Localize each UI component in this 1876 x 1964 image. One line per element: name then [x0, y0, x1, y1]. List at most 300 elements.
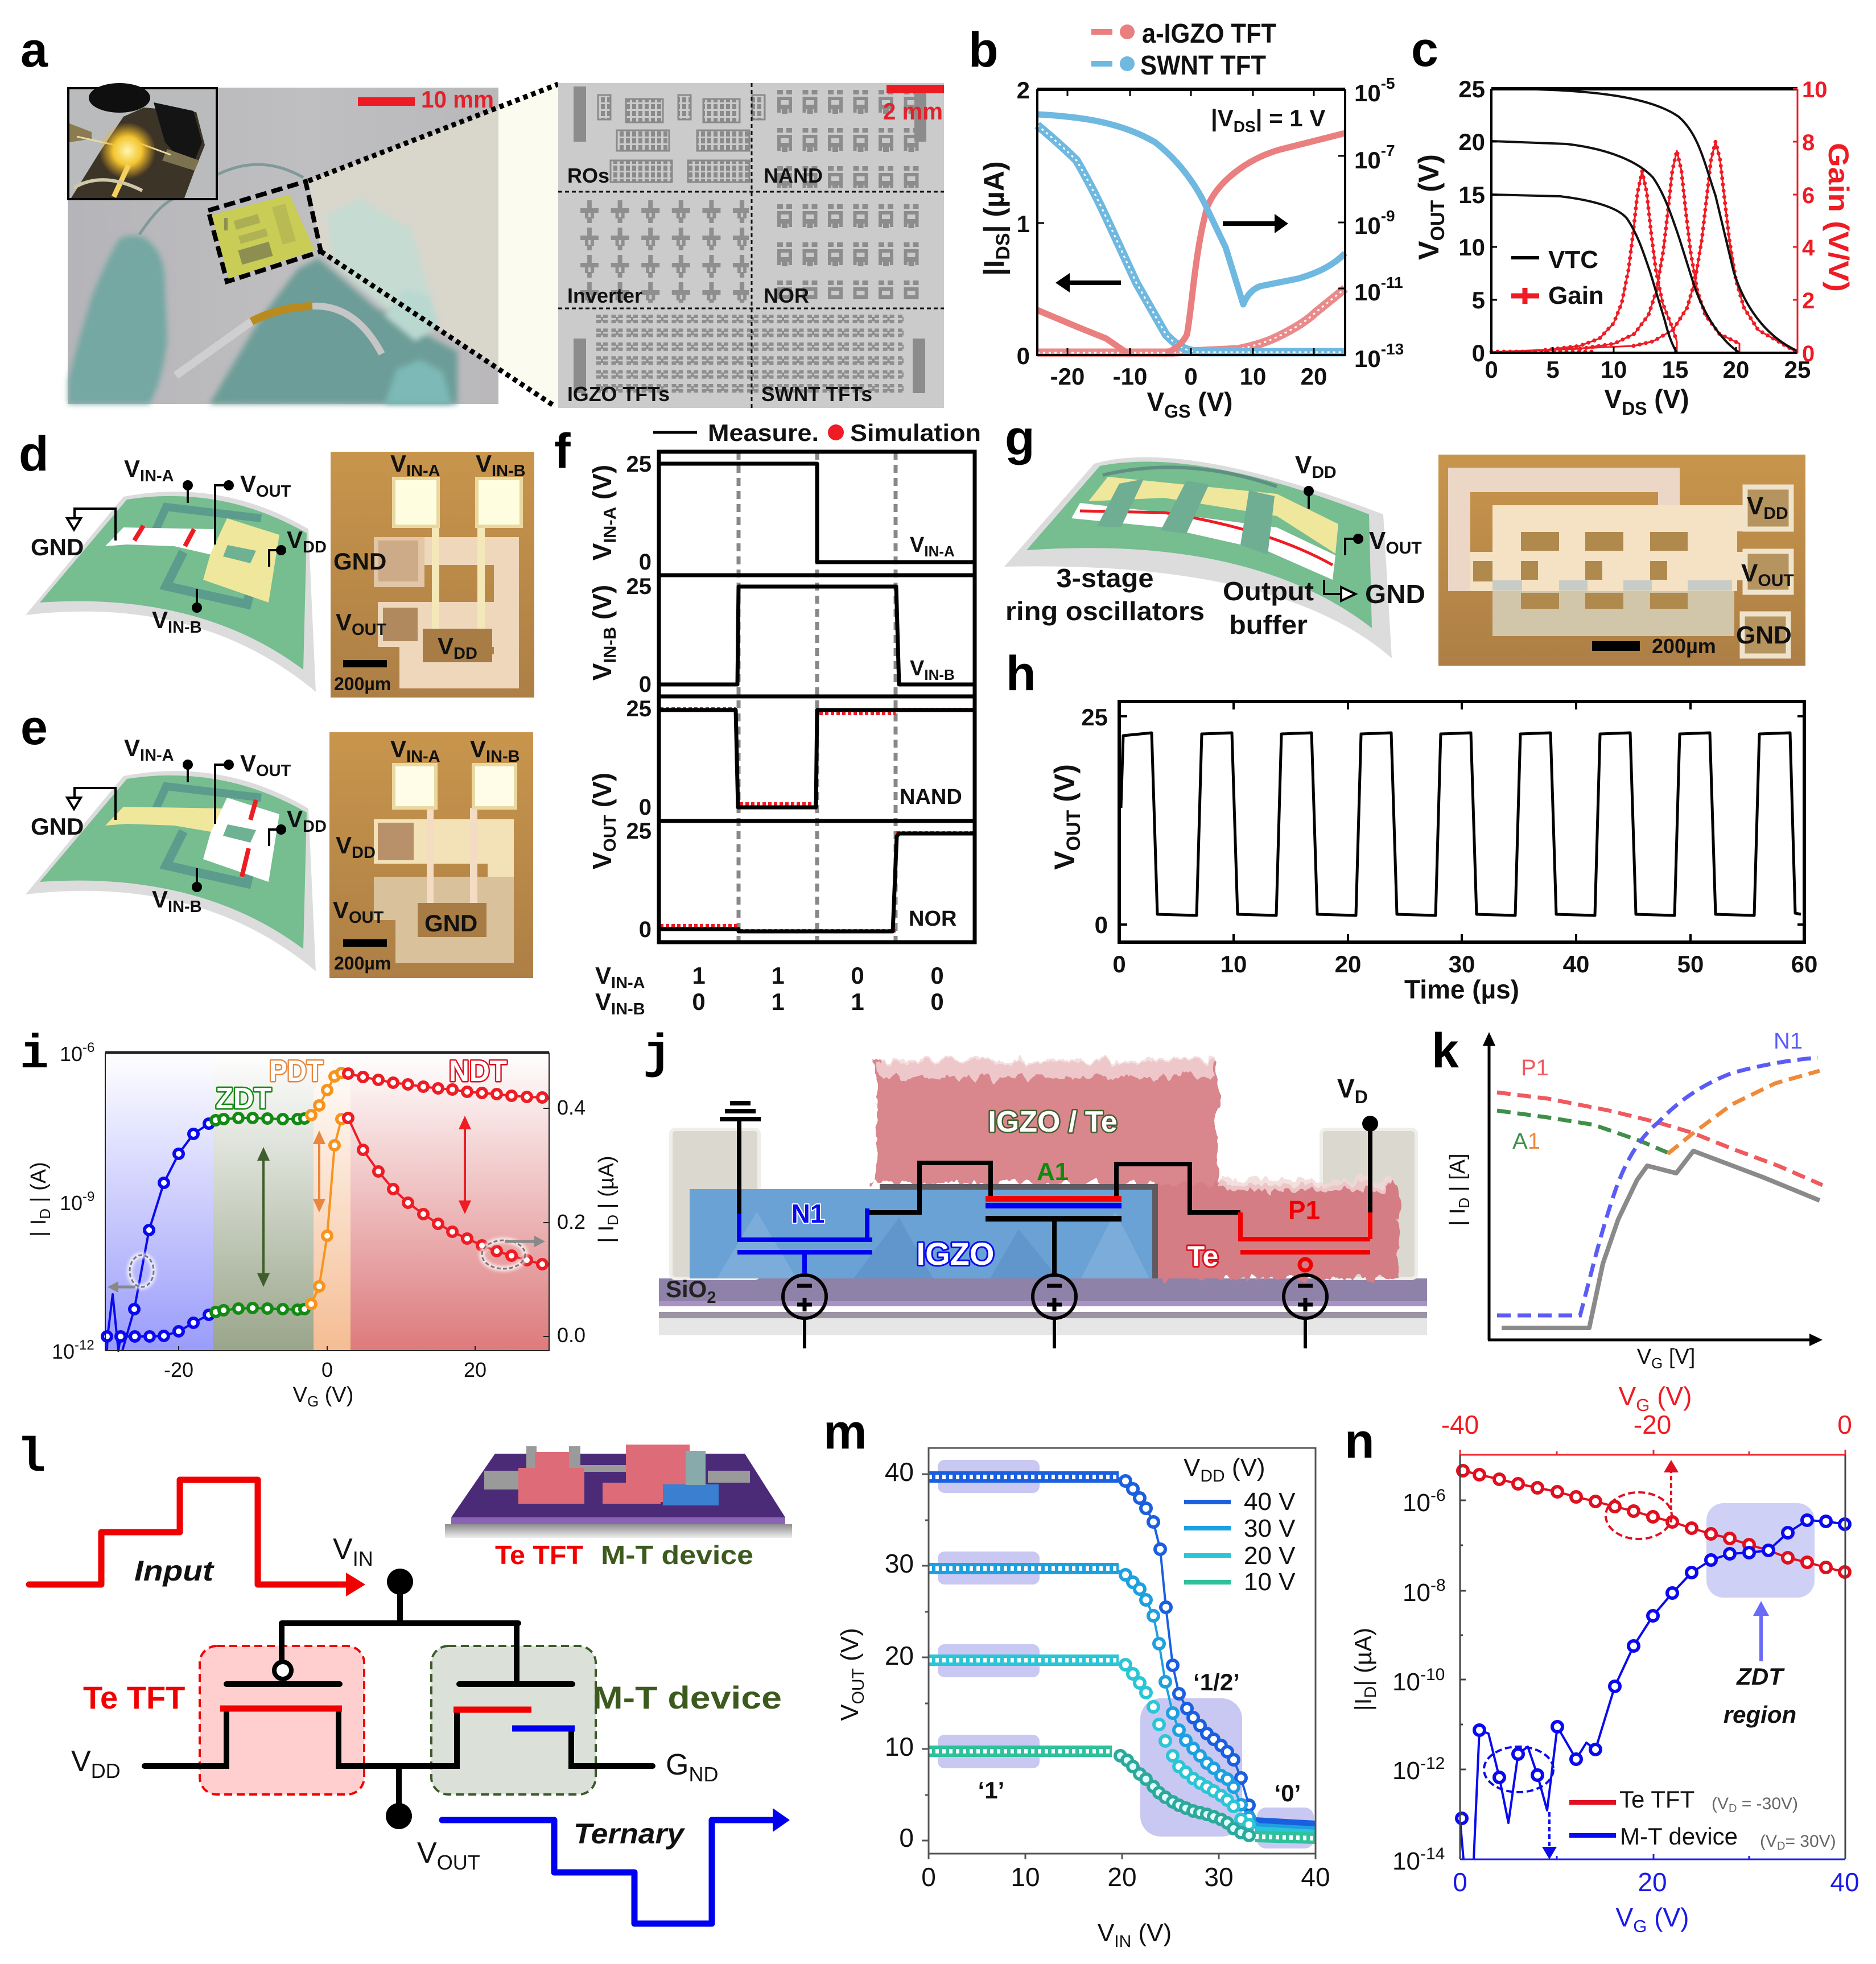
panel g: micrograph — [1438, 455, 1805, 666]
legend c: VTC — [1548, 246, 1598, 274]
trace labels f: V — [910, 533, 924, 557]
labels e micrograph: DD — [352, 844, 376, 862]
tick labels m — [885, 1457, 1330, 1892]
background regions — [105, 1053, 549, 1351]
3D device render: Te TFT — [495, 1540, 583, 1570]
labels e schematic: V — [152, 886, 168, 913]
legend m: DD — [1200, 1467, 1225, 1486]
tick labels f: 0 — [639, 672, 652, 697]
flat ring series — [929, 1477, 1316, 1838]
substrate layers — [659, 1278, 1427, 1335]
labels g schematic: GND — [1365, 579, 1425, 609]
x title b: GS — [1164, 401, 1190, 422]
titles h: (V) — [1049, 764, 1081, 810]
axis labels b: -13 — [1381, 340, 1404, 358]
region labels i: NDT — [449, 1055, 507, 1088]
tick labels h: 50 — [1677, 951, 1704, 977]
legend n: (V — [1712, 1794, 1729, 1813]
panel label c: c — [1411, 22, 1438, 77]
truth table f: 0 — [692, 988, 706, 1015]
dashed selection box and zoom lines — [208, 84, 558, 405]
circuit wires — [145, 1582, 653, 1816]
labels d micrograph: V — [390, 450, 406, 477]
labels e micrograph: V — [333, 897, 349, 923]
y titles f: V — [587, 543, 617, 560]
labels d schematic: V — [240, 471, 256, 497]
10 V markers — [1115, 1751, 1254, 1841]
bottom axis labels: G — [1633, 1916, 1647, 1936]
icon: flexible yellow film — [212, 195, 315, 279]
y title c: OUT — [1427, 200, 1449, 241]
bottom axis labels: 40 — [1830, 1867, 1859, 1897]
labels l: ND — [688, 1763, 718, 1786]
red right tick labels c — [1802, 77, 1828, 366]
panel label n: n — [1345, 1414, 1375, 1468]
bottom axis labels: V — [1616, 1903, 1633, 1932]
panel label e: e — [20, 700, 48, 755]
bottom axis labels: 20 — [1638, 1867, 1667, 1897]
30 V markers — [1120, 1570, 1254, 1822]
red Te and IGZO/Te block — [876, 1062, 1398, 1278]
axis labels b: -11 — [1381, 274, 1403, 291]
tick labels c — [1458, 76, 1811, 383]
titles i: | I — [595, 1226, 619, 1243]
top axis labels: V — [1619, 1381, 1636, 1411]
tick labels h: 25 — [1081, 704, 1108, 731]
tick labels h: 40 — [1563, 951, 1589, 977]
axes b — [1037, 89, 1345, 355]
tick labels i: 0.4 — [557, 1096, 586, 1119]
labels d schematic: GND — [31, 534, 84, 560]
region labels: NAND — [764, 164, 823, 187]
M-T device box — [431, 1646, 596, 1794]
scale bar: 2 mm — [883, 85, 944, 125]
y titles f: (V) — [587, 773, 617, 815]
labels e schematic: GND — [31, 813, 84, 840]
panel e: micrograph: 200µm — [334, 953, 391, 973]
tick labels i: 10 — [60, 1191, 83, 1215]
panel f: logic waveforms — [587, 419, 981, 1018]
bottom axis labels: (V) — [1647, 1903, 1689, 1932]
tick labels f: 0 — [639, 550, 652, 575]
tick labels n left: 10 — [1392, 1757, 1420, 1785]
labels g schematic: OUT — [1386, 539, 1422, 558]
labels l: V — [417, 1837, 437, 1870]
legend b: a-IGZO TFT — [1142, 19, 1276, 49]
axes k — [1483, 1032, 1823, 1346]
labels d micrograph: OUT — [352, 621, 387, 639]
curve lines — [1460, 1471, 1845, 1859]
titles h — [1049, 764, 1519, 1004]
labels g schematic: V — [1369, 527, 1386, 555]
tick labels m: 20 — [885, 1641, 914, 1670]
panel label b: b — [968, 23, 999, 77]
tick labels m: 10 — [1011, 1862, 1040, 1892]
panel h: oscillator waveform chart — [1049, 702, 1817, 1004]
region labels: SWNT TFTs — [761, 382, 872, 406]
labels g micrograph: V — [1741, 559, 1758, 587]
titles m — [836, 1628, 1172, 1951]
axis labels b: 0 — [1017, 343, 1030, 369]
whitish top fringe — [879, 1059, 1386, 1190]
tick labels m: 0 — [899, 1823, 914, 1852]
logic level labels: ‘1/2’ — [1193, 1669, 1240, 1695]
gate voltage sources — [783, 1275, 1327, 1348]
truth table f: 1 — [851, 988, 864, 1015]
labels j: SiO — [666, 1276, 707, 1302]
trace labels f: IN-A — [924, 543, 955, 560]
scale bar: 10 mm: 10 mm — [421, 86, 494, 113]
panel d: micrograph: 200µm — [334, 674, 391, 694]
labels d micrograph: IN-A — [406, 462, 440, 480]
panel b: transfer curve chart — [978, 19, 1404, 422]
titles i: D — [36, 1208, 53, 1219]
tick labels n left: 10 — [1392, 1847, 1420, 1875]
legend c — [1511, 246, 1604, 310]
labels d micrograph: IN-B — [492, 462, 526, 480]
tick labels c: 15 — [1458, 181, 1485, 208]
labels j: Te — [1188, 1240, 1218, 1272]
red right tick labels c: 2 — [1802, 288, 1815, 313]
arrow heads n — [1542, 1460, 1679, 1859]
y title b: DS — [992, 233, 1014, 260]
axis labels b: 10 — [1354, 345, 1381, 372]
panel e: micrograph — [329, 732, 533, 978]
labels g schematic: 3-stage — [1056, 563, 1154, 593]
labels l: IN — [353, 1547, 373, 1570]
labels d schematic: DD — [303, 538, 327, 556]
tick labels f: 0 — [639, 795, 652, 820]
titles h: Time (µs) — [1404, 975, 1519, 1004]
labels g micrograph: OUT — [1758, 571, 1794, 590]
labels l: DD — [91, 1759, 121, 1783]
legend m: 20 V — [1244, 1542, 1296, 1570]
axis labels b: 10 — [1354, 279, 1381, 306]
tick labels h — [1081, 704, 1817, 977]
legend b: SWNT TFT — [1140, 51, 1266, 81]
tick labels i: 0 — [321, 1358, 333, 1381]
icon: left glove finger — [68, 236, 167, 404]
region labels i: PDT — [269, 1055, 323, 1088]
truth table f: 0 — [930, 962, 944, 989]
gain markers — [1491, 142, 1797, 353]
tick labels i: 0.0 — [557, 1323, 586, 1347]
legend f: Simulation — [850, 419, 981, 446]
titles h: V — [1049, 851, 1081, 870]
legend f: Measure. — [708, 419, 819, 446]
trace labels f — [900, 533, 962, 931]
note: VDS condition: |V — [1211, 105, 1234, 131]
panel d: micrograph — [331, 450, 534, 698]
arrows b — [1055, 214, 1288, 292]
tick labels c: 25 — [1458, 76, 1485, 102]
shaded logic regions — [938, 1460, 1314, 1849]
labels j: D — [1355, 1087, 1368, 1107]
labels e micrograph: V — [336, 832, 352, 859]
labels d schematic: OUT — [256, 482, 291, 501]
titles h: OUT — [1063, 810, 1085, 851]
tick labels f: 25 — [626, 696, 652, 721]
truth table f: V — [595, 962, 611, 989]
labels g schematic — [1005, 451, 1425, 639]
labels k: A1 — [1512, 1129, 1540, 1154]
axis labels b: 10 — [1354, 212, 1381, 239]
labels k: [V] — [1663, 1345, 1695, 1369]
ZDT pointer — [1753, 1601, 1769, 1661]
tick labels h: 10 — [1221, 951, 1247, 977]
gain title c: Gain (V/V) — [1823, 143, 1854, 292]
side contacts — [671, 1129, 1416, 1278]
tick labels n left: -8 — [1430, 1576, 1446, 1595]
legend n: = 30V) — [1785, 1832, 1836, 1851]
labels l: V — [333, 1533, 353, 1566]
labels d schematic: IN-A — [140, 467, 174, 485]
titles c: (V) — [1647, 384, 1689, 414]
note: VDS condition: DS — [1234, 118, 1256, 135]
y title n: D — [1362, 1686, 1380, 1698]
truth table f: IN-B — [611, 1000, 645, 1018]
red right tick labels c: 6 — [1802, 183, 1815, 208]
axes i — [105, 1053, 549, 1351]
channels — [220, 1709, 575, 1728]
labels e schematic: V — [287, 806, 303, 832]
legend b — [1091, 19, 1276, 81]
legend n: M-T device — [1620, 1823, 1738, 1850]
scale bar: 10 mm — [358, 86, 494, 113]
bottom axis labels: 0 — [1453, 1867, 1467, 1897]
labels l: V — [71, 1745, 91, 1778]
legend n: = -30V) — [1737, 1794, 1798, 1813]
icon: lower fingertip — [385, 360, 452, 404]
legend n: (V — [1760, 1832, 1777, 1851]
dashed component curves — [1497, 1058, 1823, 1315]
labels e micrograph: OUT — [349, 909, 384, 927]
trace labels f: V — [910, 657, 924, 680]
orange markers — [307, 1068, 346, 1309]
legend n — [1569, 1786, 1836, 1852]
ZDT region label: region — [1724, 1701, 1796, 1728]
axes n — [1460, 1450, 1845, 1859]
tick labels h: 0 — [1112, 951, 1126, 977]
titles m: (V) — [1131, 1919, 1172, 1947]
tick labels n left: -12 — [1420, 1754, 1445, 1773]
curve lines — [107, 1073, 549, 1351]
tick labels i: -12 — [75, 1338, 94, 1353]
labels d schematic: IN-B — [168, 618, 202, 637]
tick labels m: 30 — [885, 1549, 914, 1578]
panel label d: d — [19, 427, 49, 481]
blue linear series — [1037, 125, 1345, 352]
frame f — [659, 452, 975, 942]
tick labels c: 10 — [1458, 234, 1485, 261]
panel g: ring oscillator schematic — [1004, 451, 1425, 658]
truth table f: 1 — [771, 962, 785, 989]
legend f — [653, 419, 981, 446]
dark interface — [880, 1187, 1155, 1278]
axis labels b: -9 — [1381, 207, 1395, 225]
panel label g: g — [1005, 411, 1035, 465]
tick labels i: -6 — [83, 1040, 94, 1055]
x title b: V — [1147, 387, 1164, 416]
output waveform: Ternary — [574, 1818, 685, 1850]
labels e micrograph: V — [470, 736, 486, 762]
tick labels m: 40 — [885, 1457, 914, 1487]
legend n: Te TFT — [1619, 1786, 1694, 1813]
tick labels n left: -14 — [1420, 1845, 1445, 1863]
labels g schematic: ring oscillators — [1005, 596, 1205, 626]
labels k: | I — [1446, 1208, 1470, 1226]
y title c: (V) — [1413, 154, 1445, 200]
tick labels c: 5 — [1472, 287, 1485, 313]
range arrows — [257, 1116, 471, 1287]
callout ellipses and arrows — [1484, 1472, 1672, 1847]
labels k: G — [1651, 1355, 1663, 1372]
labels d schematic — [31, 455, 327, 637]
top axis labels: G — [1636, 1395, 1650, 1415]
panel e: NOR schematic — [26, 735, 327, 971]
tick labels i — [52, 1040, 586, 1381]
tick labels m: 20 — [1107, 1862, 1137, 1892]
axes c — [1491, 89, 1797, 353]
blue markers n — [1457, 1515, 1850, 1823]
top axis labels: 0 — [1837, 1410, 1852, 1439]
x title b: (V) — [1190, 387, 1233, 416]
output waveform — [442, 1808, 790, 1924]
tick labels m: 40 — [1301, 1862, 1330, 1892]
legend m: V — [1184, 1454, 1200, 1482]
ZDT region label: ZDT — [1736, 1663, 1785, 1690]
labels l: M-T device — [592, 1680, 782, 1715]
icon: pale fingers — [327, 197, 434, 319]
axis labels b — [1017, 75, 1404, 390]
logic level labels — [978, 1669, 1301, 1806]
labels j: 2 — [707, 1289, 716, 1307]
red markers n — [1458, 1466, 1850, 1577]
labels g micrograph: DD — [1763, 504, 1788, 523]
panel m: ternary transfer chart — [836, 1448, 1330, 1951]
panel label f: f — [554, 424, 571, 478]
bottom axis labels — [1453, 1867, 1859, 1936]
labels k: | [A] — [1446, 1153, 1470, 1198]
y titles f: IN-A — [600, 507, 620, 543]
panel label m: m — [823, 1405, 867, 1459]
top axis labels — [1441, 1381, 1852, 1439]
axis labels b: 1 — [1017, 211, 1030, 237]
axis labels b: -5 — [1381, 75, 1395, 92]
labels g schematic: Output — [1223, 576, 1314, 606]
y title b: | (µA) — [978, 161, 1011, 233]
panel label i: i — [20, 1028, 48, 1082]
labels k: V — [1637, 1345, 1651, 1369]
axis indicators — [108, 1236, 545, 1293]
labels d micrograph: V — [438, 633, 453, 659]
tick labels f — [626, 452, 652, 942]
tick labels h: 0 — [1095, 911, 1108, 938]
top axis labels: -20 — [1634, 1410, 1671, 1439]
legend m: (V) — [1225, 1454, 1265, 1482]
region labels i: ZDT — [216, 1082, 271, 1115]
input waveform — [29, 1480, 365, 1596]
legend m: 10 V — [1244, 1568, 1296, 1596]
panel label h: h — [1006, 646, 1036, 701]
truth table f — [595, 962, 944, 1018]
y title b: |I — [978, 260, 1010, 276]
labels g micrograph: GND — [1736, 621, 1792, 649]
panel label l: l — [17, 1431, 46, 1486]
panel n: Te TFT and M-T device transfer chart — [1350, 1381, 1859, 1936]
icon: wire — [139, 164, 303, 234]
labels e schematic: DD — [303, 818, 327, 836]
note: VDS condition: | = 1 V — [1256, 105, 1325, 132]
labels e micrograph — [333, 736, 520, 936]
y title n: | (µA) — [1350, 1628, 1376, 1686]
legend n: D — [1729, 1802, 1737, 1815]
region labels: IGZO TFTs — [567, 382, 670, 406]
labels j: A1 — [1037, 1158, 1069, 1186]
gray total current — [1502, 1151, 1820, 1328]
measured traces — [660, 464, 974, 931]
panel g: micrograph: 200µm — [1652, 634, 1716, 658]
frame m — [922, 1448, 1316, 1859]
labels j: V — [1337, 1074, 1355, 1103]
tick labels f: 0 — [639, 917, 652, 942]
labels l: G — [666, 1748, 688, 1781]
axis labels b: 0 — [1184, 363, 1198, 390]
tick labels f: 25 — [626, 819, 652, 844]
tick labels c: 0 — [1472, 340, 1485, 366]
labels d micrograph: DD — [453, 645, 477, 663]
titles i: (V) — [319, 1383, 353, 1407]
tick labels c: 20 — [1458, 129, 1485, 155]
labels e schematic: V — [124, 735, 140, 761]
labels j — [666, 1074, 1368, 1307]
region labels: Inverter — [567, 284, 642, 307]
region labels: NOR — [764, 284, 809, 307]
panel j: device cross-section — [659, 1059, 1427, 1348]
labels k: D — [1456, 1198, 1473, 1208]
truth table f: V — [595, 988, 611, 1015]
tick labels m: 30 — [1204, 1862, 1234, 1892]
tick labels m: 0 — [921, 1862, 936, 1892]
labels d schematic: V — [152, 606, 168, 633]
green markers — [211, 1113, 309, 1317]
ZDT region — [1706, 1503, 1815, 1598]
logic level labels: ‘1’ — [978, 1777, 1004, 1804]
titles i: | (µA) — [595, 1156, 619, 1215]
titles i: D — [604, 1215, 621, 1226]
tick labels f: 25 — [626, 452, 652, 477]
labels g micrograph: V — [1747, 492, 1763, 520]
axis labels b: 2 — [1017, 77, 1030, 104]
titles c: V — [1604, 384, 1622, 414]
panel label a: a — [20, 23, 48, 77]
legend m: 40 V — [1244, 1488, 1296, 1516]
simulation dots — [660, 709, 975, 931]
titles m: (V) — [836, 1628, 864, 1668]
tick labels n left — [1392, 1486, 1446, 1875]
labels g schematic: V — [1295, 451, 1312, 479]
tick labels i: 20 — [464, 1358, 486, 1381]
40 V markers — [1120, 1476, 1254, 1810]
curve lines — [1119, 1478, 1262, 1826]
panel d: NAND schematic — [26, 455, 327, 692]
labels d micrograph: V — [476, 450, 492, 477]
panel a: photo of flexible circuit — [68, 83, 498, 404]
tick labels c: 20 — [1723, 356, 1749, 383]
axis labels b: 10 — [1354, 147, 1381, 174]
labels d micrograph — [333, 450, 526, 663]
top axis labels: (V) — [1650, 1381, 1692, 1411]
